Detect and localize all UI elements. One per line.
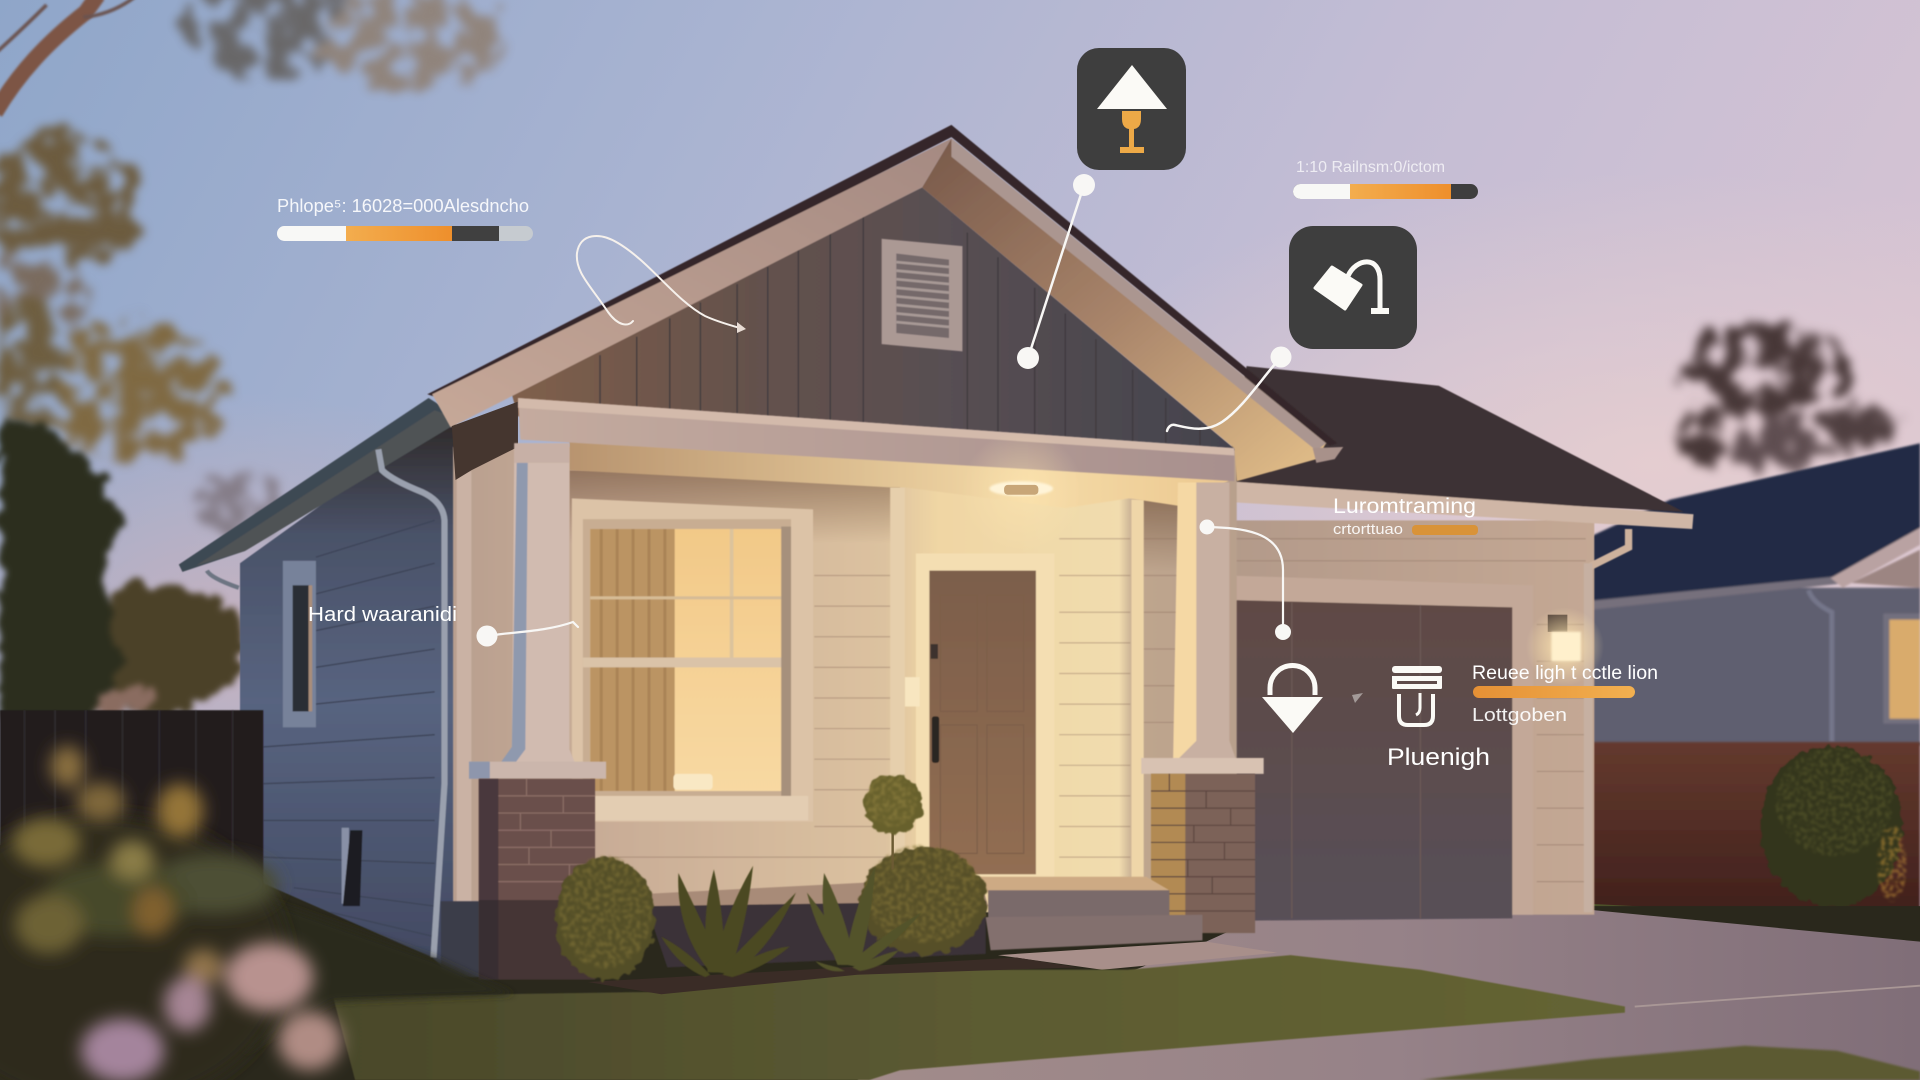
porch ceiling and beam: [518, 398, 1234, 508]
topiary: [863, 775, 922, 869]
label: lumination: [1333, 494, 1478, 538]
connector: lamp to gable: [1017, 174, 1095, 369]
brick plinths: [441, 774, 1255, 980]
icon: hanging light: [1262, 666, 1323, 733]
left fence: [0, 710, 263, 894]
front door: [905, 553, 1054, 884]
main gable: [427, 125, 1343, 481]
label block: light level: Reuee ligh t cctle lion: [1472, 663, 1658, 684]
ground and driveway: [0, 845, 1920, 1080]
label: lumination: crtorttuao: [1333, 521, 1403, 538]
label: hard warranty: Hard waaranidi: [308, 604, 457, 626]
connector: pendant icon to roof: [1167, 346, 1292, 431]
garage wing: [1224, 366, 1693, 921]
porch ceiling light: [961, 431, 1084, 553]
label: plumbing: Pluenigh: [1387, 744, 1490, 771]
label block: light level: [1472, 663, 1658, 725]
tree branch and canopy top left: [0, 0, 506, 113]
data bar: top right label: [1293, 159, 1478, 199]
garage wall light: [1526, 607, 1604, 686]
icon tile: pendant faucet light: [1289, 226, 1417, 349]
blurred foreground flowers: [0, 746, 342, 1080]
front wall of the porch: [453, 447, 1237, 912]
neighbour fence and bush: [1587, 742, 1920, 945]
palm plant left: [661, 866, 796, 977]
porch columns: [469, 443, 1264, 779]
porch steps: [647, 877, 1202, 967]
connector: warranty label to window: [476, 622, 578, 646]
shrub right: [860, 845, 987, 955]
shrub left: [555, 856, 655, 980]
data bar: top left label: [277, 196, 533, 241]
dark grass by the wing: [233, 888, 514, 1053]
icon: ceiling fixture: [1392, 666, 1442, 725]
background trees on the left: [0, 131, 283, 722]
neighbour house: [1586, 443, 1920, 746]
left wing of the house: [179, 398, 456, 980]
small arrow marker: [1352, 693, 1363, 703]
label block: light level: Lottgoben: [1472, 705, 1567, 725]
background tree on the right: [1682, 323, 1902, 470]
soffit under left eave: [452, 402, 518, 480]
front window: [572, 498, 813, 822]
icon tile: table lamp: [1077, 48, 1186, 170]
label: lumination: Luromtraming: [1333, 494, 1476, 518]
gable vent: [882, 239, 962, 351]
curved arrow: roof: [577, 236, 746, 333]
data bar: top left label: Phlope⁵: 16028=000Alesdncho: [277, 196, 529, 216]
lawn: [333, 955, 1625, 1080]
data bar: top right label: 1:10 Railnsm:0/ictom: [1296, 159, 1445, 176]
connector: column to lower icon: [1200, 520, 1291, 640]
palm plant right: [807, 866, 922, 971]
mulch bed and shrubs: [555, 775, 1078, 994]
